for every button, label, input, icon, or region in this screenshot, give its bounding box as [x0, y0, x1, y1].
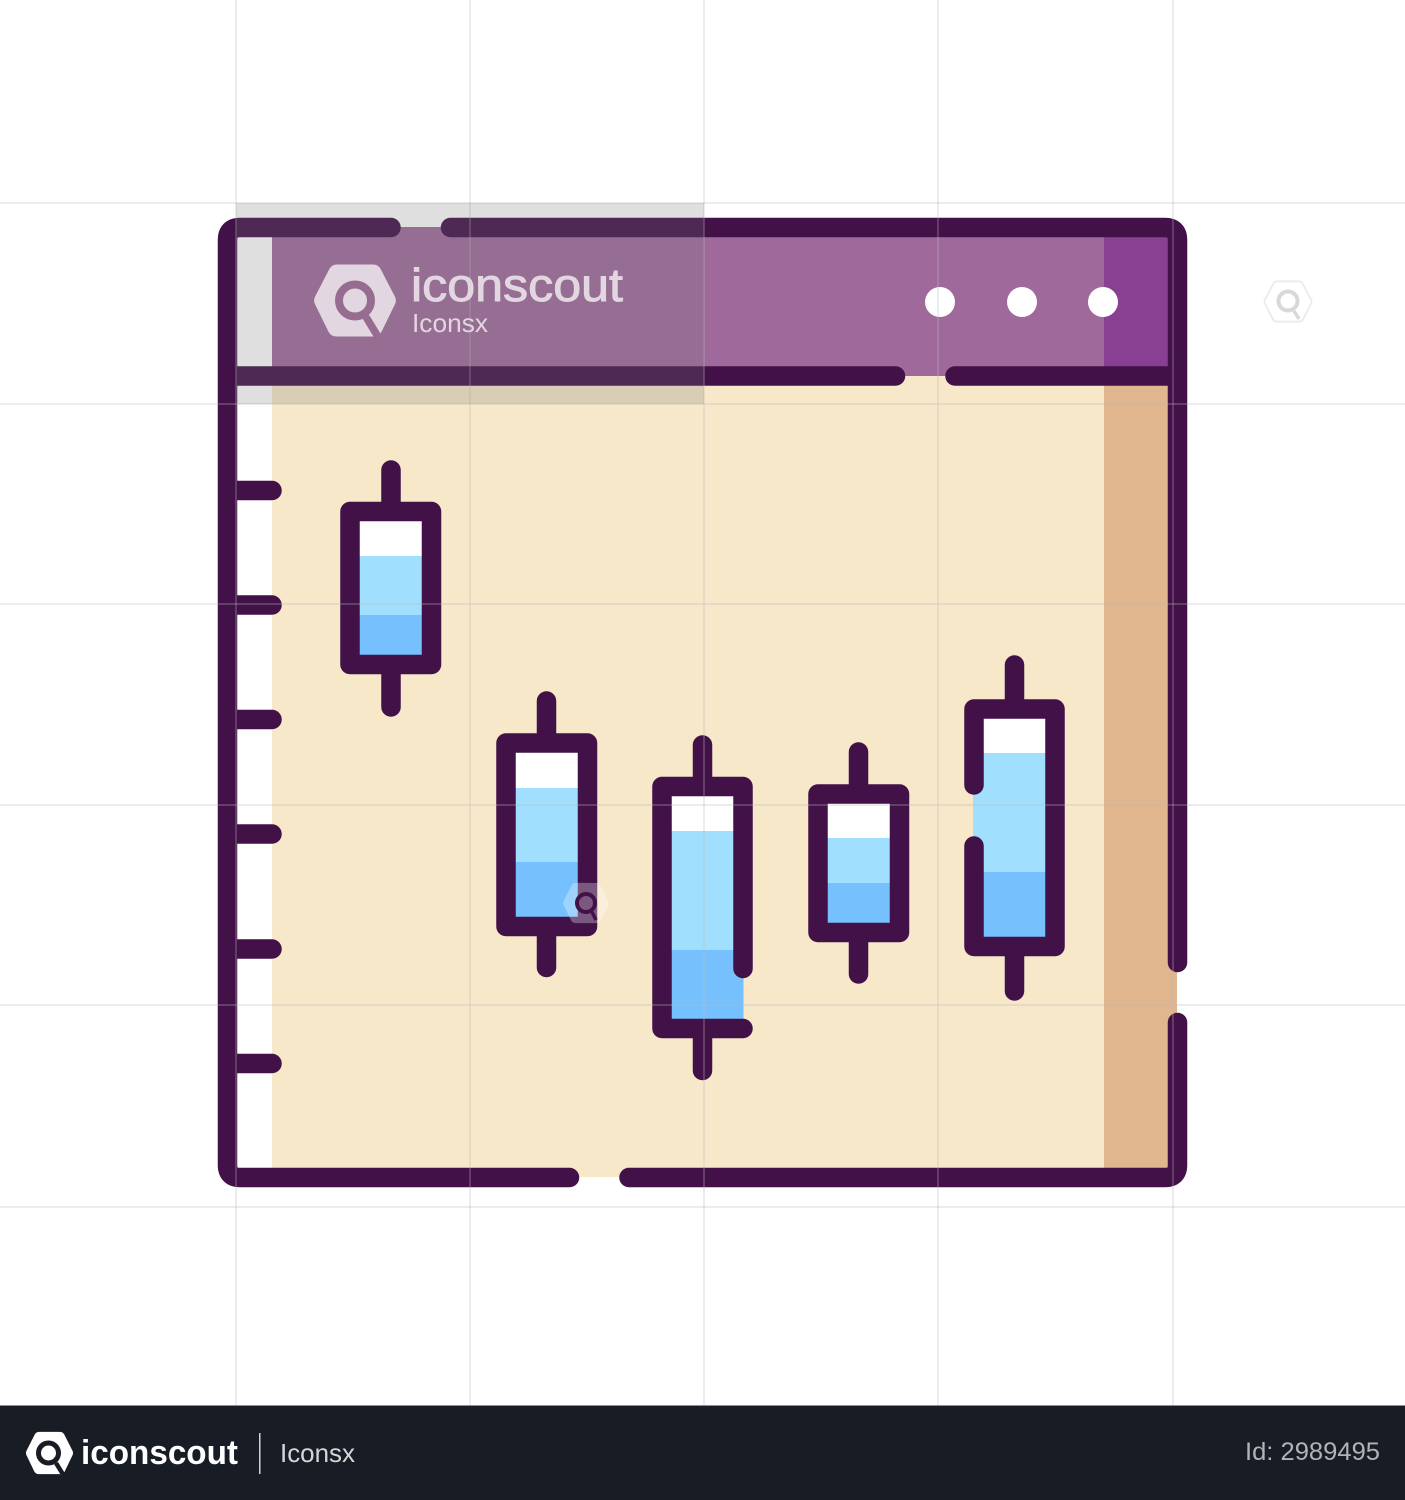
watermark author name: Iconsx — [412, 308, 488, 338]
candle 1 — [350, 470, 432, 707]
candle 5 — [973, 665, 1055, 991]
candlestick chart — [350, 470, 1055, 1070]
candle 4 — [818, 752, 900, 974]
footer separator — [259, 1433, 260, 1474]
watermark tile — [236, 203, 704, 404]
icon: magnifier in hexagon — [339, 284, 380, 340]
small watermark: right — [1264, 281, 1312, 322]
watermark brand name: iconscout — [411, 259, 623, 311]
window outline — [228, 228, 1178, 1178]
candle 2 — [506, 701, 588, 968]
axis tick marks — [229, 490, 272, 1064]
footer author name: Iconsx — [280, 1438, 355, 1468]
small watermark: centre — [563, 883, 609, 923]
footer brand name: iconscout — [81, 1434, 238, 1472]
icon: iconscout hexagon — [314, 264, 396, 336]
footer asset id: Id: 2989495 — [1245, 1438, 1380, 1466]
browser window fills — [227, 227, 1177, 1177]
watermark logo: iconscout — [314, 259, 623, 340]
candle 3 — [662, 745, 744, 1070]
window title bar dots — [925, 287, 1118, 317]
icon: footer logo — [26, 1432, 73, 1476]
footer bar — [0, 1406, 1405, 1500]
